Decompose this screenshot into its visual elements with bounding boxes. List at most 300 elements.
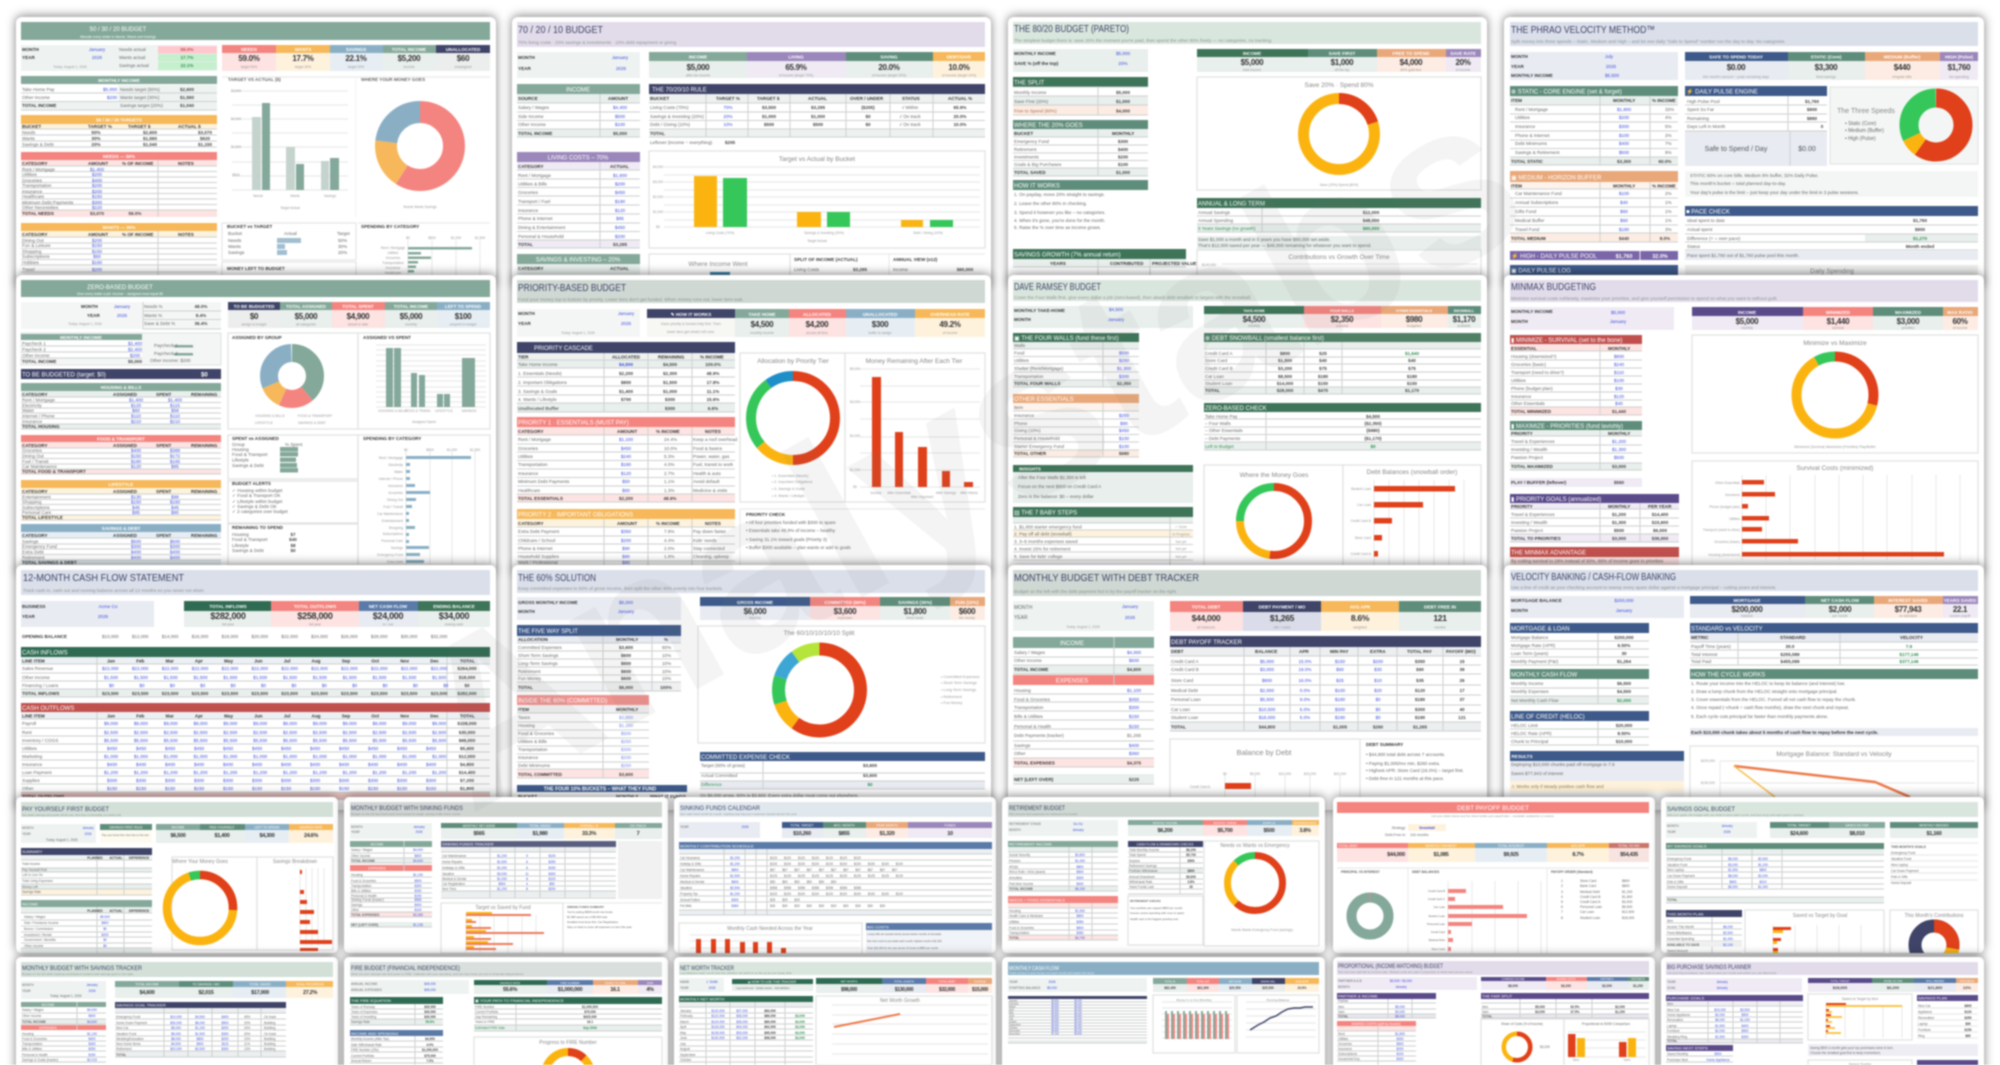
table: monthly income: TOTAL INCOME [22,103,56,108]
table: cash outflows: Marketing [22,754,43,759]
table: monthly contribution schedule [679,842,992,915]
table: minimize survival: Housing (downsized?) [1511,354,1557,359]
table: income and expenses: $500 [414,879,422,883]
chart: assigned vs spent: ASSIGNED VS SPENT [363,335,411,340]
table: monthly ledger: $5,500 [1074,1032,1082,1036]
input box: GROSS MONTHLY INCOME [518,600,578,605]
KPI tiles: $1,170 [1453,315,1476,324]
table: needs: Groceries [22,178,43,183]
input box: MONTH [518,55,536,60]
chart: target vs actual by bucket: Living Costs (70%) [706,231,734,235]
table: the 70/20/10 rule: $500 [813,122,824,127]
input box: January [618,311,635,316]
title band: SAVINGS GOAL BUDGET [1667,806,1735,813]
table: debt payoff tracker: $0 [1375,707,1381,712]
table: partners income: $5,000 [1395,1005,1405,1009]
table: income and expenses: Transportation [22,1042,43,1046]
chart: spending by category: Shopping [389,526,403,530]
table: monthly income: Paycheck 1 [154,343,178,348]
chart: assigned vs spent: LIFESTYLE [435,409,454,413]
table: the 7 baby steps: In Progress [1172,532,1190,536]
table: monthly net worth: April [680,1025,687,1029]
KPI tiles: OVERHEAD RATE [930,312,970,317]
table: minimize survival: $100 [1614,378,1625,383]
KPI tiles: per month [1832,614,1848,618]
table: monthly ledger: $6,900 [1051,1024,1059,1026]
table: where the 20% goes: Emergency Fund [1014,139,1049,144]
KPI tiles: 27.2% [303,990,317,996]
chart: proportional share bars [1564,1019,1649,1065]
table: income and expenses: Savings [351,903,363,907]
table: savings goal tracker: Retirement [116,1047,132,1051]
chart: net worth growth: Net Worth Growth [880,998,920,1004]
chart: debt balances: Credit Card B [1350,519,1372,523]
KPI tiles: $77,943 [1895,605,1922,614]
KPI tiles: DEBT FREE IN [1424,604,1457,610]
table: income: AMOUNT [608,96,628,101]
text block: how it works: 4. When it's gone, you're done for the month. [1014,218,1105,223]
KPI tiles: in / out [383,622,393,626]
KPI tiles: LEFT TO SPEND [445,304,482,309]
callout: play buffer: PLAY / BUFFER (leftover) [1511,480,1567,485]
table: lifestyle: Subscriptions [22,505,50,510]
table: the 70/20/10 rule: STATUS [902,96,920,101]
table: the fire equation: Years of Runway [351,1005,375,1009]
table: other essentials: $450 [1119,428,1130,433]
table: monthly contribution schedule: $100 $100 $100 $100 $100 $100 $100 $100 $100 $100 [770,862,903,866]
table: medium horizon buffer: 1% [1665,209,1672,214]
list: goal status: THIS MONTH'S GOALS [1891,845,1926,849]
table: income and expenses: $1,100 [87,1032,97,1036]
KPI tiles: FREE TO SPEND [1393,51,1430,56]
table: daily pulse log [1510,265,1678,275]
table: savings goal tracker: $200 [221,1026,229,1030]
table: monthly income: MONTHLY INCOME [60,335,102,340]
table: priority 2 important obligations: 7.8% [664,529,674,534]
KPI tiles: all balances [1197,626,1215,630]
title band [1666,962,1978,975]
callout: results: RESULTS [1511,754,1533,759]
table: shared costs: Subscriptions [1338,1052,1358,1056]
table: monthly income: $1,560 [180,95,194,100]
table: debt payoff tracker: EXTRA [1370,649,1386,654]
table: cash outflows: CASH OUTFLOWS [22,706,74,712]
panel: remaining to spend: REMAINING TO SPEND [232,525,284,530]
table: needs: Utilities [22,172,38,177]
table: monthly net worth [679,996,813,1065]
input box: $5,000 [1611,310,1625,315]
table: priority cascade: $800 [621,380,632,385]
table: inside the 60%: ITEM [518,707,529,712]
table: income and expenses: Savings [1014,743,1031,748]
table: the four walls [1013,333,1139,387]
table: income and spending: INCOME AND SPENDING [351,1031,398,1036]
table: income and expenses: $4,000 [1127,650,1141,655]
table: savings goal tracker: $4,500 [171,1042,181,1046]
callout: growth box: Log month end · Update assets · Add liabilities [736,986,790,990]
table: monthly cash flow: $6,500 [1617,681,1631,686]
table: monthly income: Needs target (50%) [120,87,160,92]
table: income and expenses: Personal & Health [351,894,377,898]
callout: method note [1685,171,1978,197]
table: debt snowball: $75 [1319,366,1327,371]
KPI tiles: of income (target 70%) [779,74,813,78]
table: committed expense check: $3,600 [863,763,877,768]
table: debt payoff tracker: $800 [1262,678,1273,683]
table: the four walls: $2,350 [1117,381,1131,386]
title band: THE 60% SOLUTION [518,572,596,584]
table: savings goal tracker: Building [264,1037,276,1041]
table: priority 1 essentials: $180 [621,462,632,467]
table: living costs: Personal & Household [518,234,564,239]
table: monthly income: Other Income [22,95,50,100]
table: income and expenses: Salary / Wages [1014,650,1046,655]
input box [350,823,432,839]
chart: spending by category: $1,500 [475,236,485,240]
text block: how the cycle works: 4. Once repaid (~chunk ÷ cash flow months), draw the next chunk and repeat. [1691,705,1849,710]
table: income and expenses [1013,637,1154,784]
table: debt snowball: Credit Card B [1205,366,1233,371]
title band: MONTHLY BUDGET WITH DEBT TRACKER [1014,572,1199,584]
chart: target vs actual by bucket: Debt / Giving (10%) [913,231,943,235]
table: monthly ledger: August [1009,1020,1017,1024]
list: payoff order: 5 [1561,900,1563,904]
table: the 70/20/10 rule: THE 70/20/10 RULE [652,88,707,94]
table: the 70/20/10 rule: 65.9% [953,105,967,110]
table: inside the 60% [517,695,649,778]
KPI tiles: NET FLOW [1229,980,1242,984]
chart: daily spending: Daily Spending [1810,268,1854,275]
table: living costs [517,152,640,248]
table: cash flow and drawdown checks: Annual Drawdown [1129,875,1155,879]
KPI tiles: $98,000 [841,987,858,993]
chart: balance by debt: $10,000 [1279,772,1291,776]
KPI tiles: NET CASH FLOW [1821,598,1860,603]
table: income: $0 [103,938,107,942]
chart: target vs actual: Target Actual [280,206,300,210]
table: needs: $200 [92,183,103,188]
table: monthly net worth: $3,000 [795,1036,805,1040]
list: saved amounts: $120 [1964,1010,1972,1014]
table: needs [21,152,217,217]
table: pace check: Difference (+ = over pace) [1687,236,1741,241]
table: housing and bills: $120 [131,403,142,408]
table: minimize survival: $30 [1615,386,1623,391]
table: housing and bills: HOUSING & BILLS [101,385,141,390]
chart: target vs actual by bucket: $1,000 [653,210,663,214]
table: monthly contribution schedule: $1,500 [730,874,740,878]
callout: high daily pulse pool: $1,760 [1616,254,1632,260]
table: static core engine: $400 [1619,141,1630,146]
KPI tiles [816,978,992,993]
table: cash outflows: Inventory / COGS [22,738,58,743]
table: food and transport: CATEGORY [22,443,48,448]
input box: Acme Co [99,604,118,609]
table: savings goal tracker: $10,000 [170,1015,182,1019]
table: cash outflows: Supplies [22,778,40,783]
table: zero-based check: $4,500 [1366,414,1380,419]
KPI tiles [1808,978,1978,992]
table: other essentials [1013,394,1139,457]
KPI tiles [1204,306,1481,328]
chart: contributions vs growth: $140,000 [1202,263,1216,267]
table: cash flow and drawdown checks: Portfolio Withdrawal [1129,869,1158,873]
table: cash outflows: $12,000 [459,754,476,759]
table: needs: $200 [92,189,103,194]
KPI tiles: $2,015 [198,990,214,996]
table: cash outflows: $9,000 $9,000 $9,000 $9,000 $9,000 $9,000 $9,000 $9,000 $9,000 $9,000 $9,000 $9,000 [104,721,447,726]
input box: YEAR [87,313,100,318]
callout: growth box: ▤ HOW TO USE THIS TRACKER [748,980,797,984]
callout: savings first [100,824,152,843]
card: monthly budget with debt tracker [1008,565,1487,810]
KPI tiles: TOTAL DEBT [1338,844,1358,848]
table: minimize survival: Groceries (basic) [1511,362,1546,367]
table: debt payoff tracker: 40 [1459,707,1465,712]
table: monthly income: $200 [107,95,118,100]
table: the four walls: $300 [1119,374,1130,379]
table: priority 2 important obligations: 1.8% [664,554,674,559]
table: standard vs velocity: METRIC [1691,635,1709,640]
table: the 70/20/10 rule: TARGET % [716,96,740,101]
table: cash flow and drawdown checks: $9,600 [1186,875,1196,879]
KPI tiles [222,45,490,71]
table: income: TOTAL INCOME [518,131,552,136]
title band [679,962,992,975]
table: standard vs velocity: VELOCITY [1900,635,1923,640]
chart: minimize vs maximize: Minimize vs Maximize [1803,340,1867,347]
table: other essentials: $250 [1119,413,1130,418]
table: income and expenses: Other Income [351,854,371,858]
table: debt payoff tracker: $90 [1416,667,1424,672]
input box: SAVE % (off the top) [1014,61,1059,66]
table: debt snowball: $25 [1319,351,1327,356]
KPI tiles: $20,500 [1229,986,1241,990]
KPI tiles: 22% [1963,985,1971,990]
list: payoff order [1551,870,1634,920]
KPI tiles [1153,978,1319,992]
KPI tiles: 8.7% [1572,852,1584,858]
table: medium horizon buffer: ▣ MEDIUM - HORIZON BUFFER [1511,176,1602,182]
chart: where your money goes: WHERE YOUR MONEY GOES [361,77,425,82]
title band [679,802,992,817]
table: savings growth [1013,249,1197,275]
table: partners income: Alex [1338,1005,1345,1009]
card: MinMax budgeting [1504,275,1984,575]
table: needs and fixed essentials: Health Care & Medicare [1009,914,1043,918]
input box: 2026 [708,986,716,990]
table: my savings goals: $5,000 [1728,857,1738,861]
table: savings and debt: Retirement [22,555,45,560]
text block: how the cycle works: 1. Route your income into the HELOC to keep its balance (and interest) low. [1691,681,1845,686]
input box: YEAR [680,986,689,990]
table: summary: DIFFERENCE [129,856,149,860]
input box: YEAR [22,55,35,60]
input box: January [86,983,98,987]
table: monthly income: TOTAL INCOME [22,359,56,364]
table: the split [1013,77,1148,115]
table: priority 1 essentials: 5.3% [664,454,674,459]
chart: save vs spend donut: Save 20% · Spend 80% [1304,82,1374,89]
table: needs: AMOUNT [88,161,108,166]
table: savings goal tracker: $300 [221,1032,229,1036]
title band [1008,962,1319,975]
KPI tiles: INCOME [1738,310,1756,315]
table: priority goals: $6,000 [1653,528,1667,533]
chart: assigned vs spent: Assigned Spent [412,420,436,424]
table: the fire equation: Savings Rate [351,1020,370,1024]
input box: $45,000 [424,988,436,992]
chart: money remaining after each tier: Money Remaining After Each Tier [866,358,963,365]
table: mortgage and loan: 30 [1621,651,1627,656]
table: priority 2 important obligations: Stay connected [693,546,725,551]
table: this month's plan: AVAILABLE TO SAVE [1667,943,1699,947]
table: purchase goals: $1,000 [1740,1018,1750,1022]
chart: net worth growth [816,996,992,1065]
table: savings growth: CONTRIBUTED [1110,261,1144,266]
table: summary: PLANNED [87,856,103,860]
table: committed expense check [700,752,985,798]
chart: spending by category: Car Maintenance [377,512,403,516]
table: medium horizon buffer: ITEM [1511,184,1522,188]
table: where the 20% goes: $300 [1118,139,1129,144]
table: debt snowball: $75 [1408,366,1416,371]
KPI tiles [649,52,985,78]
table: monthly income: $2,600 [180,87,194,92]
table: priority 1 essentials: NOTES [705,429,721,434]
table: daily pulse engine: $1,760 [1805,99,1819,104]
table: fair split [1481,993,1649,1018]
KPI tiles: of income [1953,326,1967,330]
KPI tiles: full year [309,622,322,626]
KPI tiles: ENDING BALANCE [433,604,475,609]
table: savings and debt [21,524,221,565]
table: pace check: Ideal spent to date [1687,218,1725,223]
table: the five way split: 100% [660,685,672,690]
table: where the 20% goes: TOTAL SAVED [1014,170,1046,175]
table: the five way split: ALLOCATION [518,637,548,642]
table: purchase goals: PURCHASE GOALS [1667,996,1704,1000]
title band: Minimize survival costs ruthlessly, maximize your priorities, and give yourself permission to spend on what you want to without guilt. [1511,296,1778,301]
title band [1510,22,1978,46]
chart: income vs outgo bars [1153,995,1235,1053]
table: purchase goals: Laptop [1667,1024,1677,1028]
chart: assigned vs spent: FOOD & TRANS. [405,409,431,413]
table: minimize survival: Insurance [1511,394,1532,399]
chart: target vs actual by bucket [649,151,985,248]
chart: spending by category: Dining Out [387,498,403,502]
table: priority cascade: TIER [518,354,529,360]
chart: save vs spend donut: Save (20%) Spend (80%) [1320,183,1358,187]
table: monthly income: MONTHLY INCOME [98,78,140,83]
table: monthly ledger: $6,800 [1051,1006,1059,1008]
table: fair split: THE FAIR SPLIT [1482,994,1513,998]
chart: debt balances: Student Loan [1428,914,1445,918]
table: debt payoff tracker: Student Loan [1171,715,1199,720]
watermark: Analystabs [369,42,1561,858]
chart: progress to FIRE number: Progress to FIRE Number [539,1040,597,1046]
table: savings and investing: CATEGORY [518,266,544,271]
table: monthly income: Paycheck 2 [154,351,178,356]
table: static core engine: Debt Minimums [1515,141,1548,146]
KPI tiles: $3,200 [1561,984,1571,988]
table: sinking funds tracker: $100 [548,877,556,881]
table: food and transport: $172 [170,454,181,458]
table: the five way split: TOTAL [518,685,533,690]
table: pace check: ■ PACE CHECK [1686,210,1730,216]
table: mortgage and loan: Mortgage Balance [1511,635,1549,640]
text block: budget notes [1013,465,1193,503]
table: monthly ledger: $5,100 [1074,1002,1082,1006]
title band: MONTHLY BUDGET WITH SAVINGS TRACKER [22,965,142,972]
table: income and expenses: $250 [88,1047,96,1051]
KPI tiles: MAXIMIZED [1895,310,1922,315]
table: the 70/20/10 rule: $1,000 [762,114,776,119]
table: 50/30/20 targets: TARGET % [88,124,112,129]
table: monthly contribution schedule: $1,200 [730,892,740,896]
table: medium horizon buffer: Travel Fund [1515,227,1540,232]
chart: running balance: Running Balance [1267,998,1290,1002]
KPI tiles: MONTHLY SPEND [1214,821,1237,825]
table: income: $200 [101,933,109,937]
table: my savings goals: $6,500 [1728,885,1738,889]
table: monthly income: $2,400 [128,347,142,352]
title band: Plan income and expenses for retirement by bucket. [1009,812,1078,816]
chart: five-way split donut: The 60/10/10/10/10 Split [784,630,855,637]
table: food and transport: $388 [170,448,181,453]
KPI tiles: of income (target 20%) [872,74,906,78]
table: priority goals: $3,000 [1612,536,1626,541]
table: annual and long term: ANNUAL & LONG TERM [1198,202,1265,208]
table: saving next steps [1666,1045,1733,1062]
table: the four walls: Walls [1014,343,1026,348]
table: debt payoff tracker: 121 [1458,715,1466,720]
table: priority 2 important obligations: 4.4% [664,538,674,543]
table: monthly contribution schedule: $125 $125 $125 $125 $125 $125 $125 $125 $125 $125 [770,874,903,878]
KPI tiles: TOTAL TARGET [1830,979,1850,983]
KPI tiles: available [1457,324,1471,328]
table: the five way split: $6,000 [619,685,633,690]
table: maximize priorities: $3,000 [1612,464,1626,469]
title band: VELOCITY BANKING / CASH-FLOW BANKING [1511,571,1676,583]
input box: Savings actual [119,63,149,68]
table: partners income [1337,993,1436,1018]
table: housing and bills: Water [22,408,35,413]
table: the four walls: ▣ THE FOUR WALLS (fund these first) [1014,336,1119,342]
table: inside the 60%: $3,600 [619,772,633,777]
KPI tiles: monthly [1248,324,1260,328]
table: the fire equation: Years of Expenses [351,1010,378,1014]
callout: results: Deploying $10,000 chunks paid off mortgage in 7.9 [1511,762,1615,767]
KPI tiles: SWR [647,981,653,985]
table: monthly cash flow: $4,500 [1617,689,1631,694]
table: the 70/20/10 rule: Leftover (income − everything) [650,140,713,145]
input box: 2026 [92,55,103,60]
KPI tiles: $32,000 [939,987,956,993]
table: debt snowball: $40 [1319,358,1327,363]
input box [21,45,217,71]
input box: YEAR [22,832,31,836]
KPI tiles: total income [1243,68,1261,72]
table: monthly income: $1,040 [180,103,194,108]
table: 50/30/20 targets: 50% [91,130,101,135]
table: wants: CATEGORY [22,232,48,237]
table: savings goal tracker: 30% [244,1032,251,1036]
table: priority 1 essentials: Fuel, transit to work [693,462,734,467]
chart: spending by category: SPENDING BY CATEGORY [361,224,419,229]
table: priority cascade: $4,500 [663,362,677,367]
table: saving next steps: Purchase Next [1667,1058,1688,1062]
